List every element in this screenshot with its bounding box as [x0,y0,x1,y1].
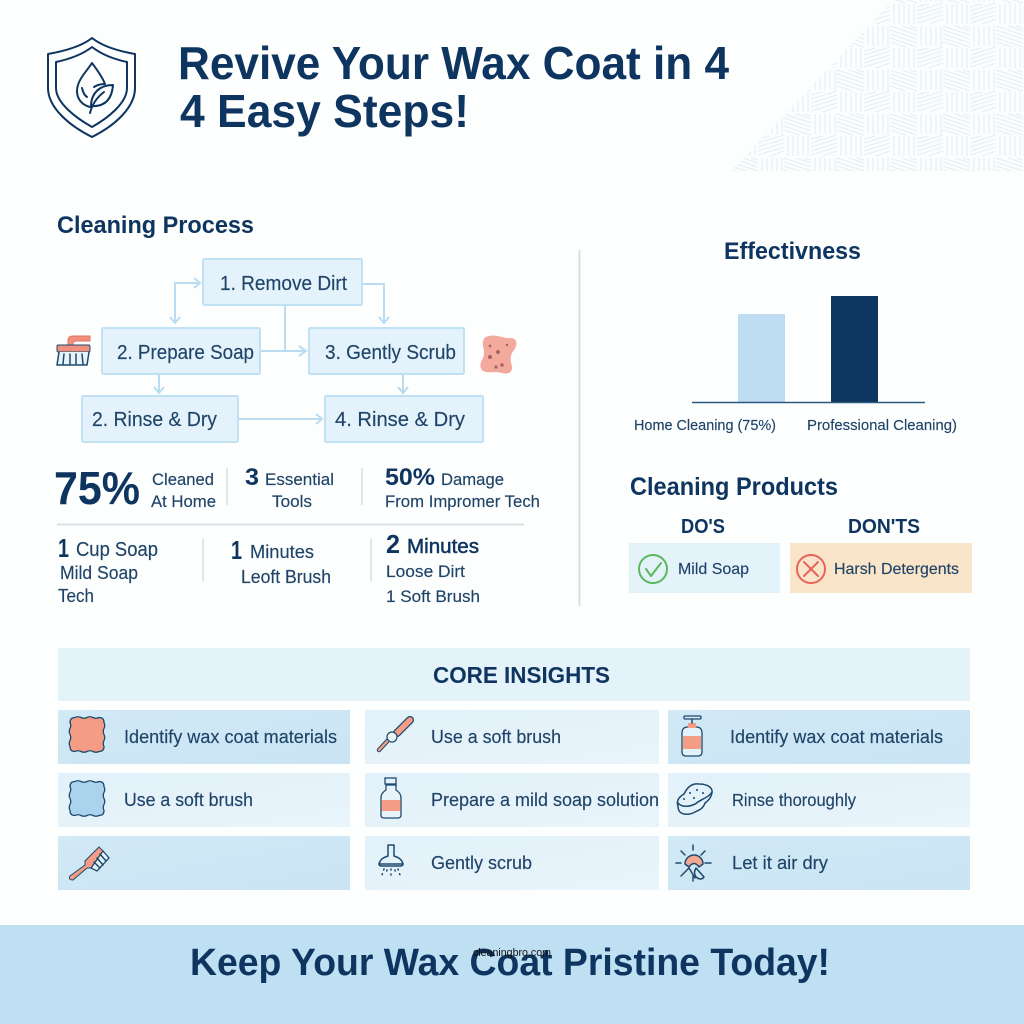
bar: home cleaning [738,314,785,402]
arrow: rinse to rinse [238,414,322,424]
step 2 rinse box [82,396,238,442]
step 2 rinse box: 2. Rinse & Dry [92,409,217,431]
insight: gently scrub [365,836,659,890]
stat: 50% damage: Damage [441,470,504,489]
icon: sponge [480,336,516,374]
flowchart: cleaning process [82,259,483,442]
step 1 box [203,259,362,305]
bar: professional cleaning [831,296,878,402]
stat: 1 minutes [231,535,331,587]
insight: identify wax coat materials (column 3): Identify wax coat materials [730,727,943,747]
heading: cleaning products: Cleaning Products [630,473,838,501]
title [178,37,729,137]
step 3 box: 3. Gently Scrub [325,342,456,364]
stat: 1 cup soap: Cup Soap [76,539,158,561]
step 2 prepare soap box: 2. Prepare Soap [117,342,254,364]
bar chart: effectiveness [634,296,957,434]
insight: use a soft brush (column 1): Use a soft brush [124,790,253,810]
title: Revive Your Wax Coat in 4 [178,37,729,89]
icon: shield with water drop and leaf [48,38,135,137]
insight: let it air dry: Let it air dry [732,853,828,873]
step 1 box: 1. Remove Dirt [220,273,347,295]
stat: 1 minutes: Leoft Brush [241,567,331,587]
stat: 2 minutes [386,529,480,606]
step 4 box [325,396,483,442]
stat: 2 minutes: 1 Soft Brush [386,587,480,606]
stat: 1 cup soap: Tech [58,586,94,606]
stats row 2 [58,529,480,606]
panel: core insights [58,648,970,890]
insight: rinse thoroughly [668,773,970,827]
heading: cleaning process: Cleaning Process [57,212,254,239]
icon: cross [797,555,825,583]
stat: 2 minutes: 2 [386,529,400,559]
stat: 1 minutes: 1 [231,535,242,565]
label: professional cleaning: Professional Cleaning) [807,417,957,434]
insight: brush only [58,836,350,890]
stat: 3 essential tools: 3 [245,464,259,491]
stat: 50% damage: From Impromer Tech [385,492,540,511]
stat: 2 minutes: Loose Dirt [386,562,465,581]
stat: 50% damage [385,464,540,511]
stat: 1 cup soap [58,533,158,606]
watermark: cleaningbro.com [473,947,551,959]
title: 4 Easy Steps! [180,85,469,137]
insight: use a soft brush (column 1) [58,773,350,827]
stat: 50% damage: 50% [385,464,435,491]
step 4 box: 4. Rinse & Dry [335,409,465,431]
insight: use a soft brush (column 2) [365,710,659,764]
step 3 box [309,328,464,374]
step 2 prepare soap box [102,328,260,374]
background weave pattern [731,0,1024,171]
insight: prepare a mild soap solution: Prepare a mild soap solution [431,790,659,810]
stat: 75% cleaned at home [54,462,216,514]
arrow: remove dirt to prepare soap [170,278,200,323]
footer banner [0,925,1024,1024]
panel: do's [629,516,780,593]
core insights banner [58,648,970,701]
icon: check [639,555,667,583]
arrow: prepare soap to rinse [154,374,164,393]
stat: 1 cup soap: Mild Soap [60,563,138,583]
stat: 75% cleaned at home: Cleaned [152,470,214,489]
insight: prepare a mild soap solution [365,773,659,827]
stat: 3 essential tools [245,464,334,511]
stat: 1 minutes: Minutes [250,542,314,562]
stat: 3 essential tools: Essential [265,470,334,489]
insight: rinse thoroughly: Rinse thoroughly [732,790,856,810]
arrow: remove dirt to gently scrub [362,284,389,323]
stats row 1 [54,462,540,514]
panel: do's: DO'S [681,516,725,538]
insight: identify wax coat materials [58,710,350,764]
icon: scrub brush [57,336,90,365]
insight: let it air dry [668,836,970,890]
panel: do's: Mild Soap [678,561,749,578]
arrow: gently scrub to rinse [398,374,408,393]
stat: 1 cup soap: 1 [58,533,69,563]
insight: use a soft brush (column 2): Use a soft brush [431,727,561,747]
panel: don'ts: Harsh Detergents [834,561,959,578]
panel: don'ts [790,516,972,593]
stat: 75% cleaned at home: 75% [54,462,140,514]
arrow: centre connector to gently scrub [260,305,306,356]
panel: don'ts: DON'TS [848,516,920,538]
stat: 3 essential tools: Tools [272,492,312,511]
stat: 2 minutes: Minutes [407,536,479,558]
heading: effectiveness: Effectivness [724,238,861,265]
core insights banner: CORE INSIGHTS [433,662,610,688]
insight: identify wax coat materials (column 3) [668,710,970,764]
footer banner: Keep Your Wax Coat Pristine Today! [190,942,830,984]
insight: gently scrub: Gently scrub [431,853,532,873]
label: home cleaning: Home Cleaning (75%) [634,417,776,434]
insight: identify wax coat materials: Identify wax coat materials [124,727,337,747]
stat: 75% cleaned at home: At Home [151,492,216,511]
